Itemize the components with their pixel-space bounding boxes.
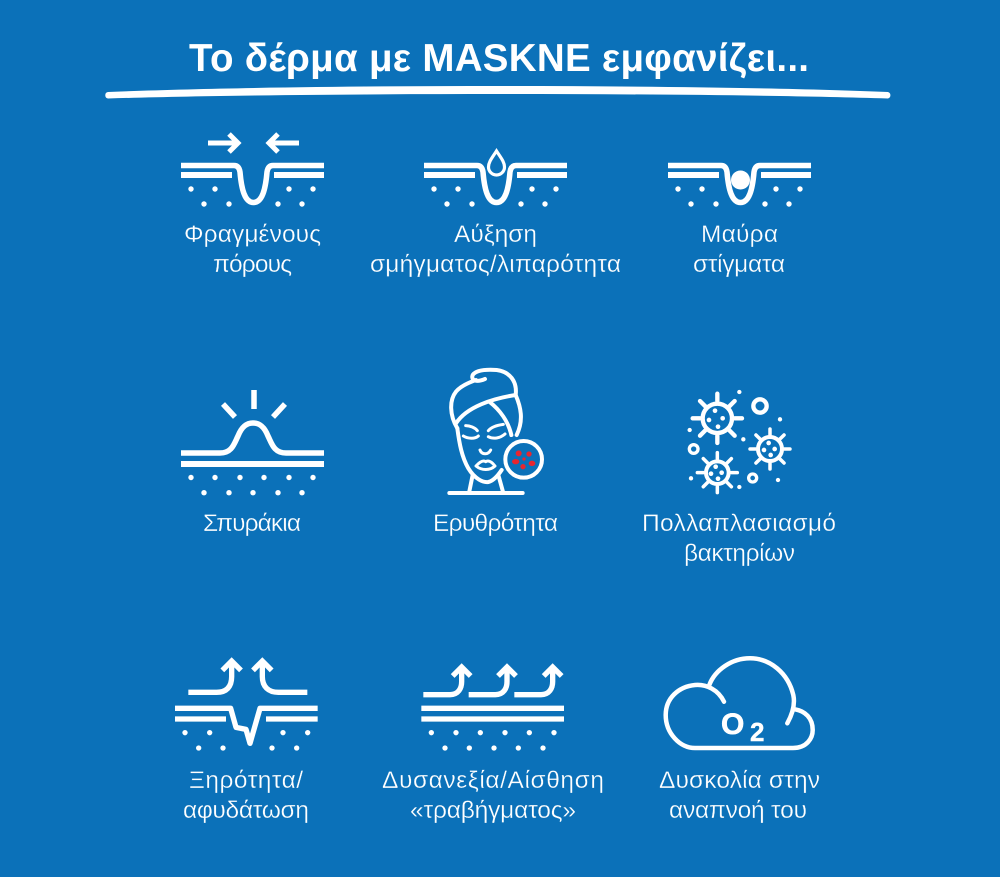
icon: bacteria cluster: [687, 390, 790, 493]
panel: bacteria: [642, 390, 836, 567]
icon: skin with three arrows: [421, 667, 564, 751]
panel: blocked pores: [181, 134, 324, 278]
panel: discomfort: [382, 667, 604, 824]
label: dryness: αφυδάτωση: [183, 797, 309, 824]
label: bacteria: [642, 510, 836, 567]
icon: cracked skin with evaporation arrows: [175, 661, 318, 751]
panel: increased sebum: [370, 151, 621, 278]
label: blackheads: Μαύρα: [701, 221, 778, 248]
icon: blocked pore with arrows: [181, 134, 324, 207]
label: blocked pores: πόρους: [213, 251, 292, 278]
icon: pore with blackhead: [668, 166, 811, 207]
label: discomfort: Δυσανεξία/Αίσθηση: [382, 767, 604, 794]
label: increased sebum: [370, 221, 621, 278]
panel: pimples: [181, 390, 324, 537]
title: Το δέρμα με MASKNE εμφανίζει...: [189, 37, 809, 80]
label: bacteria: Πολλαπλασιασμό: [642, 510, 836, 537]
panel: blackheads: [668, 166, 811, 278]
label: dryness: Ξηρότητα/: [189, 767, 303, 794]
title underline: [105, 86, 890, 98]
label: breathing difficulty: αναπνοή του: [669, 797, 807, 824]
label: redness: Ερυθρότητα: [433, 510, 558, 537]
label: blocked pores: Φραγμένους: [184, 221, 321, 248]
label: blackheads: στίγματα: [693, 251, 785, 278]
icon: O2 cloud: 2: [750, 717, 764, 747]
label: discomfort: [382, 767, 604, 824]
label: dryness: [183, 767, 309, 824]
label: pimples: Σπυράκια: [203, 510, 301, 537]
label: increased sebum: σμήγματος/λιπαρότητα: [370, 251, 621, 278]
label: increased sebum: Αύξηση: [454, 221, 537, 248]
panel: redness: [433, 370, 558, 537]
panel: dryness: [175, 661, 318, 824]
label: breathing difficulty: Δυσκολία στην: [659, 767, 820, 794]
icon: O2 cloud: [666, 658, 813, 748]
label: blocked pores: [184, 221, 321, 278]
label: bacteria: βακτηρίων: [684, 540, 795, 567]
label: blackheads: [693, 221, 785, 278]
icon: woman with towel and red spots: [449, 370, 542, 493]
panel: breathing difficulty: [659, 658, 820, 824]
icon: O2 cloud: O: [721, 708, 744, 741]
label: discomfort: «τραβήγματος»: [410, 797, 576, 824]
icon: pore with oil drop: [424, 151, 567, 207]
label: breathing difficulty: [659, 767, 820, 824]
icon: skin bump with rays: [181, 390, 324, 495]
